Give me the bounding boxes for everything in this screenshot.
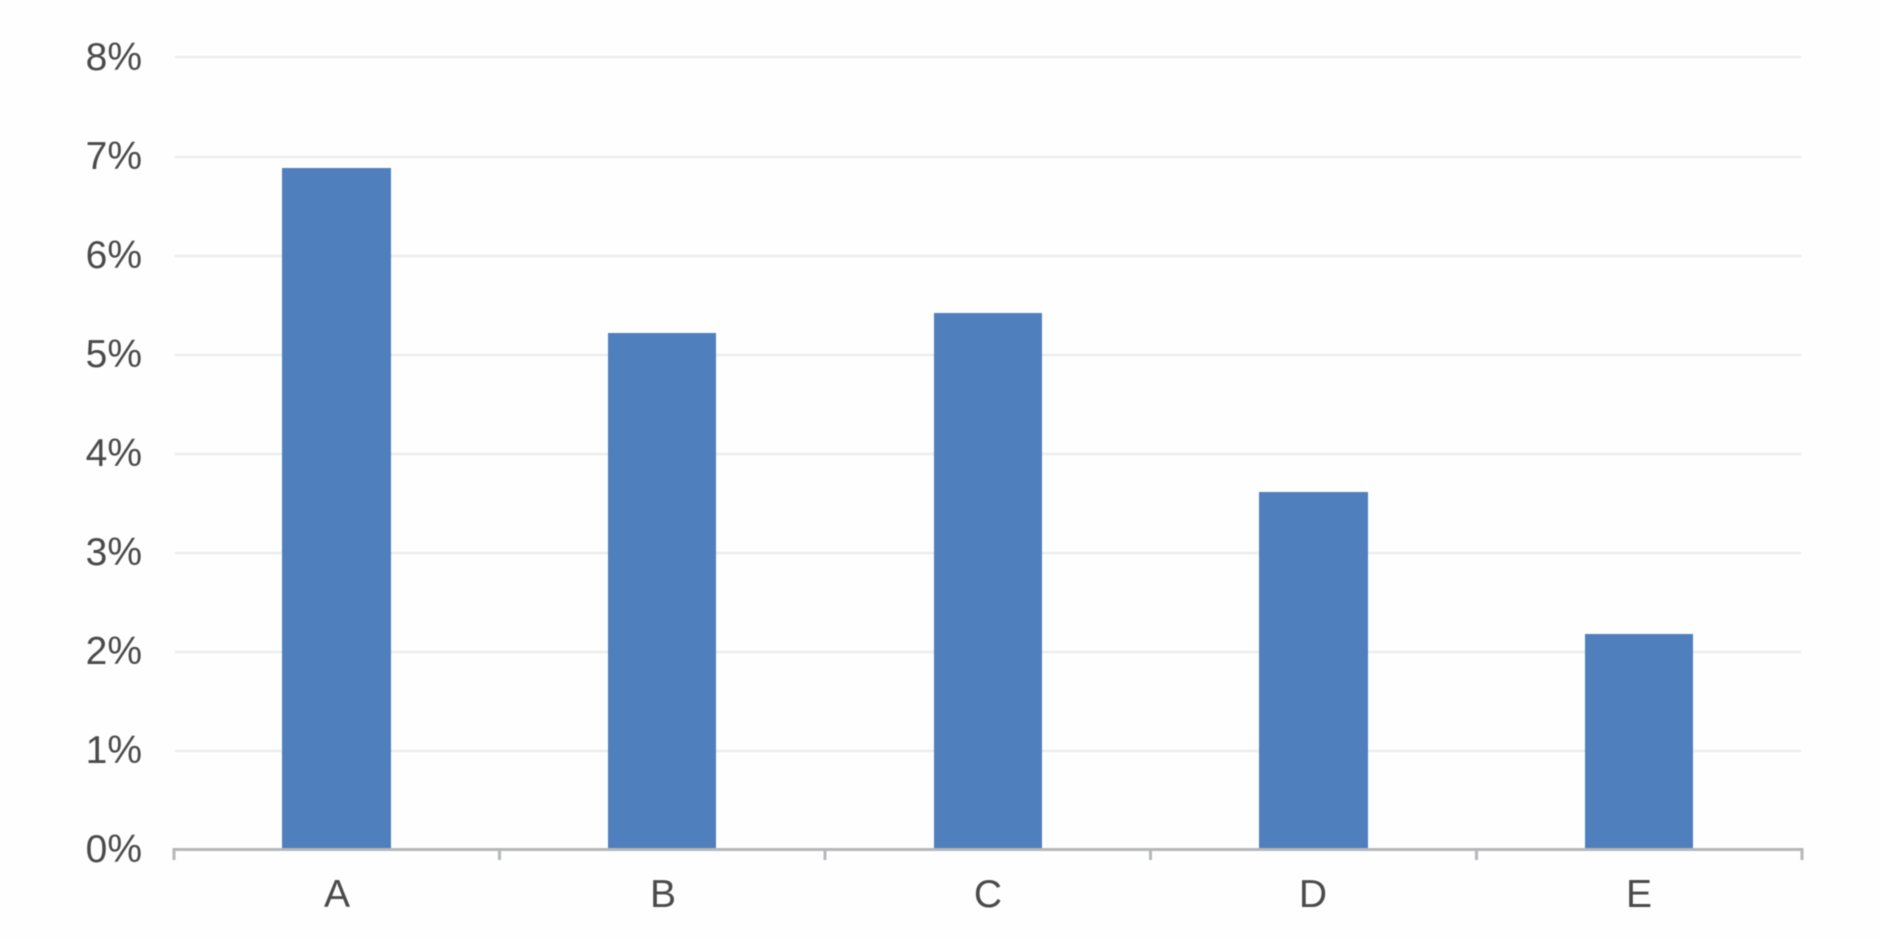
x axis labels: E bbox=[1626, 873, 1652, 916]
bar E bbox=[1585, 634, 1693, 848]
y axis labels: 4% bbox=[86, 432, 142, 475]
y axis labels: 3% bbox=[86, 531, 142, 574]
bar D bbox=[1259, 492, 1368, 848]
bar B bbox=[608, 333, 716, 848]
x axis labels: B bbox=[650, 873, 676, 916]
bar C bbox=[934, 313, 1042, 848]
bar A bbox=[282, 168, 391, 848]
y axis labels: 7% bbox=[86, 135, 142, 178]
y axis labels: 2% bbox=[86, 630, 142, 673]
y axis labels bbox=[86, 36, 142, 871]
x axis labels: D bbox=[1299, 873, 1327, 916]
x axis labels bbox=[324, 873, 1652, 916]
y axis labels: 1% bbox=[86, 729, 142, 772]
y axis labels: 6% bbox=[86, 234, 142, 277]
x axis labels: C bbox=[974, 873, 1002, 916]
y axis labels: 0% bbox=[86, 828, 142, 871]
x axis bbox=[174, 850, 1802, 860]
y axis labels: 5% bbox=[86, 333, 142, 376]
bars bbox=[282, 168, 1693, 848]
y axis labels: 8% bbox=[86, 36, 142, 79]
x axis labels: A bbox=[324, 873, 350, 916]
